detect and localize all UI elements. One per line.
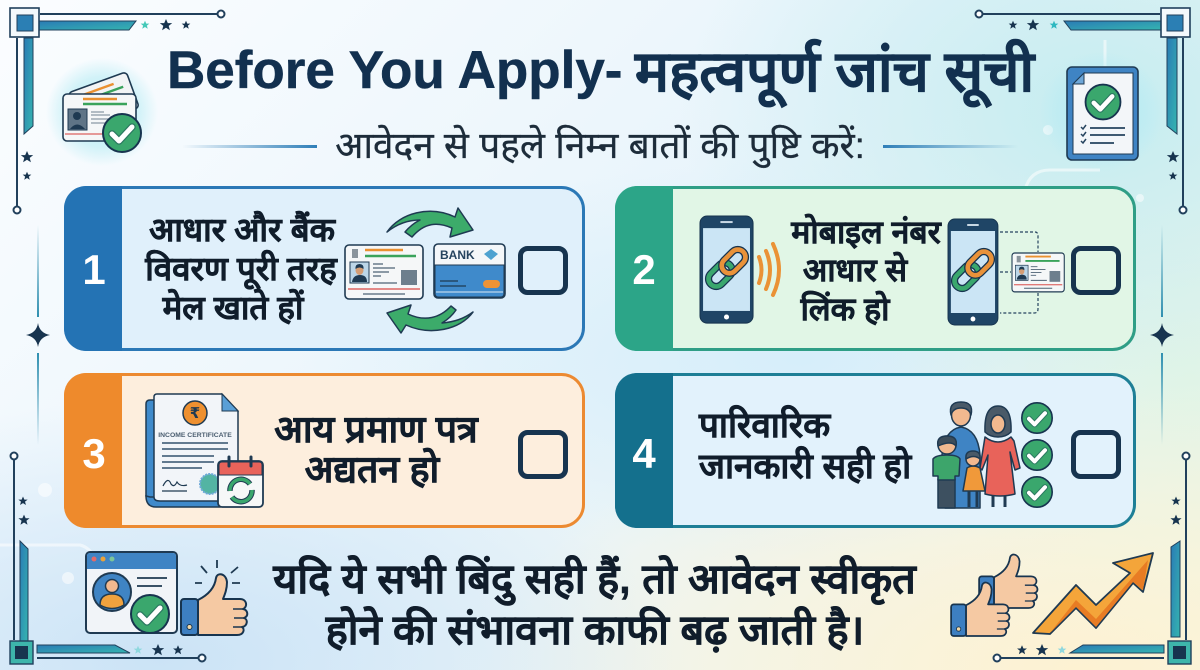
card 4 text: पारिवारिक [698, 405, 831, 445]
corner ornament: top left [10, 8, 224, 214]
side divider with sparkle: right [1150, 225, 1174, 445]
closing statement: होने की संभावना काफी बढ़ जाती है। [325, 606, 864, 653]
soft background light shapes [0, 40, 1144, 590]
subtitle: आवेदन से पहले निम्न बातों की पुष्टि करें: [335, 124, 865, 168]
side divider with sparkle: left [26, 225, 50, 445]
icon: green arrow bottom [387, 305, 473, 333]
icon: Aadhaar card [345, 245, 423, 299]
card 2 text: मोबाइल नंबर [790, 213, 943, 250]
closing statement: यदि ये सभी बिंदु सही हैं, तो आवेदन स्वीकृत [272, 555, 917, 606]
icon: income certificate: ₹ [190, 404, 200, 422]
icon: thumbs up with rays [181, 560, 247, 635]
number 3: 3 [82, 430, 106, 477]
icon: phone with link and card [948, 219, 1064, 325]
subtitle rule: right [883, 145, 1018, 148]
icon: phone with link [700, 216, 753, 323]
checkbox 4 [1074, 432, 1118, 476]
title: Before You Apply- [167, 41, 622, 100]
corner ornament: bottom right [994, 452, 1191, 664]
icon: signal waves [759, 244, 779, 295]
panel: card 1 [64, 186, 584, 351]
checkbox 2 [1074, 248, 1118, 292]
icon: three checks [1022, 403, 1052, 507]
panel: card 2 [615, 186, 1134, 351]
icon: family [933, 402, 1020, 508]
icon: income certificate [146, 394, 238, 507]
corner ornament: top right [976, 8, 1190, 214]
checkbox 3 [520, 432, 566, 476]
icon: rising arrow [1033, 553, 1153, 634]
card 1 text: मेल खाते हों [162, 288, 305, 326]
icon: bank card: BANK [440, 248, 475, 262]
icon: income certificate: INCOME CERTIFICATE [158, 432, 232, 439]
icon: Aadhaar cards with check [46, 58, 158, 166]
card 2 text: आधार से [803, 251, 909, 288]
subtitle rule: left [182, 145, 317, 148]
icon: bank card [434, 244, 505, 298]
number 1: 1 [82, 246, 106, 293]
icon: green arrow top [387, 208, 473, 237]
icon: checklist document [1040, 52, 1164, 172]
card 3 text: अद्यतन हो [305, 447, 441, 490]
icon: double thumbs up [951, 555, 1037, 636]
card 4 text: जानकारी सही हो [698, 446, 913, 486]
icon: calendar refresh [218, 457, 263, 507]
checkbox 1 [520, 248, 566, 292]
panel: card 3 [64, 373, 584, 528]
corner ornament: bottom left [10, 452, 206, 664]
icon: profile window approved [86, 552, 177, 633]
card 3 text: आय प्रमाण पत्र [274, 408, 479, 450]
card 2 text: लिंक हो [800, 290, 891, 327]
card 1 text: विवरण पूरी तरह [144, 249, 338, 290]
number 4: 4 [632, 430, 656, 477]
panel: card 4 [615, 373, 1134, 528]
card 1 text: आधार और बैंक [149, 210, 337, 248]
title: महत्वपूर्ण जांच सूची [634, 39, 1036, 108]
number 2: 2 [632, 246, 656, 293]
